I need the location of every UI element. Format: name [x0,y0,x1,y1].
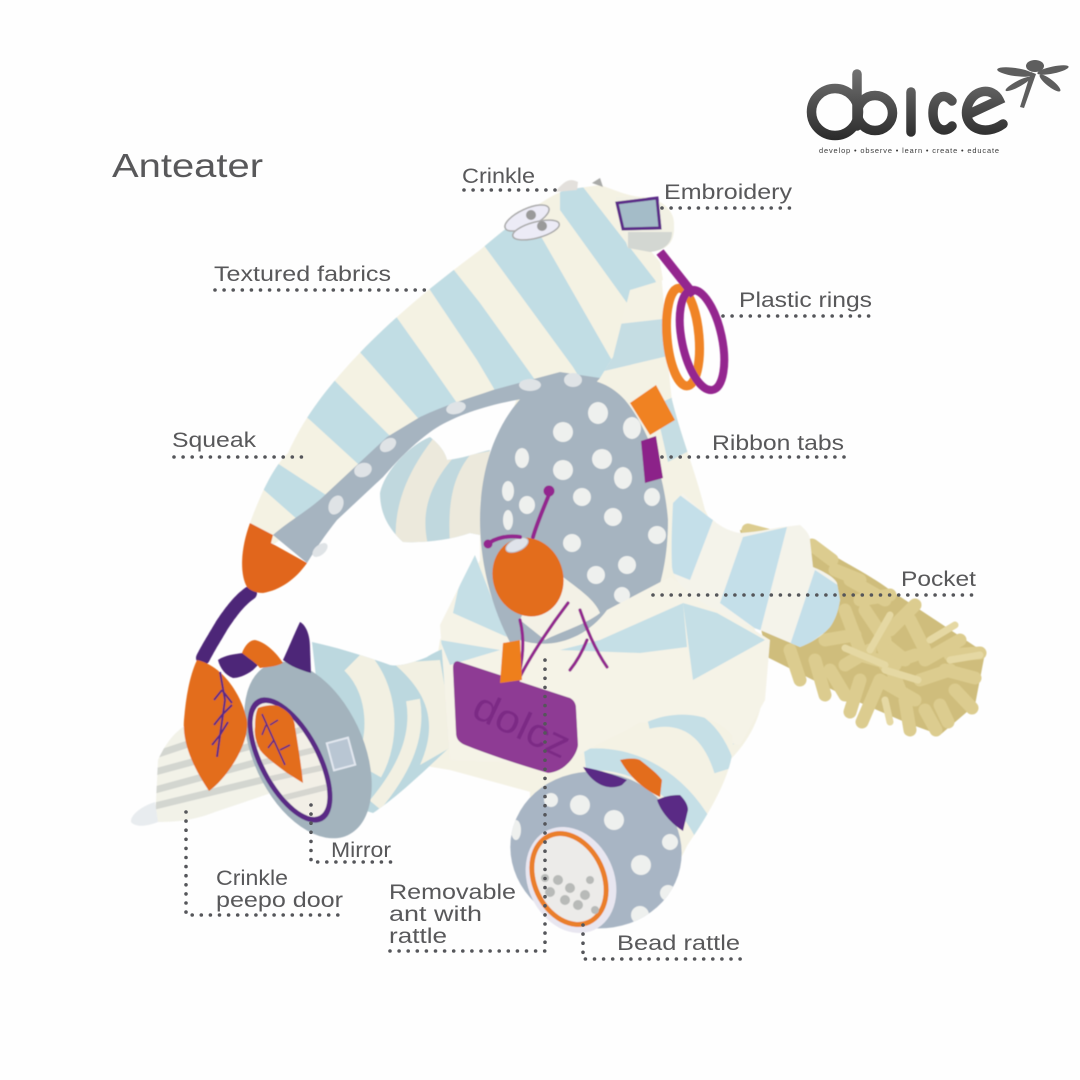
title: Anteater [112,147,263,184]
label: removable ant with rattle: rattle [389,925,447,948]
door tag [131,802,158,826]
beads [541,874,599,914]
label: embroidery [662,181,795,208]
label: removable ant with rattle [389,655,545,951]
underside grey [273,372,600,563]
right foot with bead rattle [510,758,688,933]
underside dots [310,373,582,560]
left foot with mirror [217,622,372,839]
teether brand: dolcz [466,684,577,767]
label: ribbon tabs: Ribbon tabs [712,432,844,455]
removable ant [481,486,607,683]
label: pocket: Pocket [901,568,976,591]
label: crinkle peepo door: peepo door [216,889,343,912]
right leg [530,714,732,842]
foot dots [511,793,678,924]
ear [616,197,674,252]
eyes [501,200,561,244]
illustration: anteater toy [131,170,985,948]
ant head [481,527,575,627]
ant legs [517,603,607,683]
label: mirror [311,805,392,862]
neck stripes [604,318,688,462]
belly polka panel [480,381,682,650]
foot sole [496,756,696,944]
label: embroidery: Embroidery [664,181,793,204]
door fabric [155,726,269,822]
mirror [246,696,333,824]
label: squeak [172,429,304,457]
pocket front flap [520,577,690,660]
mirror leaf [255,705,303,783]
squeak cord [203,593,250,658]
orange loop [500,640,522,683]
pocket [440,555,771,744]
foot ears [218,653,258,678]
logo letters [812,74,1003,136]
label: bead rattle: Bead rattle [617,932,740,955]
label: mirror: Mirror [331,839,391,862]
label: crinkle: Crinkle [462,165,535,188]
velcro patch [327,738,355,770]
plastic rings [660,252,732,394]
rattle window [509,812,633,948]
teether tag [453,640,578,773]
logo tagline: develop • observe • learn • create • educate [819,146,999,155]
label: crinkle [462,165,558,190]
ant body [520,560,600,640]
label: removable ant with rattle: Removable [389,881,516,904]
logo dragonfly [997,60,1069,108]
left leg [312,642,447,814]
body lower-right stripe [730,680,762,745]
foot sole [218,642,398,858]
snout and head [230,170,690,593]
right arm [671,496,841,648]
nose tip [242,523,307,593]
teether [453,661,578,773]
hanging leaf [184,660,247,791]
left arm [380,436,490,543]
foot ears [583,767,627,787]
ears tips [555,180,578,192]
label: crinkle peepo door [186,812,345,915]
tail [740,530,985,735]
label: crinkle peepo door: Crinkle [216,867,288,890]
crinkle peepo door [131,726,269,826]
ant antennae [488,492,550,544]
label: textured fabrics: Textured fabrics [214,263,391,286]
label: plastic rings: Plastic rings [739,289,872,312]
embroidery patch [617,198,660,229]
label: removable ant with rattle: ant with [389,903,482,926]
label: bead rattle [583,925,742,959]
labels [172,165,978,959]
logo: dolce [812,60,1069,155]
ribbon tabs [630,385,675,483]
body [420,260,763,860]
ant eyes [504,534,530,556]
label: squeak: Squeak [172,429,257,452]
